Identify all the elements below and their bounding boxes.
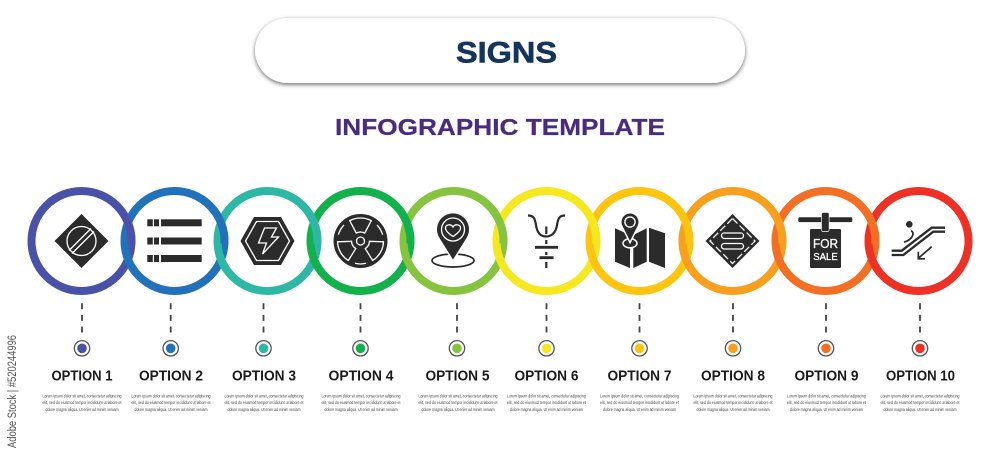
marker dot	[632, 341, 647, 356]
description: dolore magna aliqua. Ut enim ad minim veniam	[790, 407, 863, 412]
marker dot	[539, 341, 554, 356]
description: dolore magna aliqua. Ut enim ad minim veniam	[510, 407, 583, 412]
description: Lorem ipsum dolor sit amet, consectetur adipiscing	[42, 394, 122, 398]
label: OPTION 5	[426, 368, 490, 384]
description: elit, sed do eiusmod tempor incididunt ut labore et	[507, 400, 587, 405]
description	[787, 394, 867, 412]
icon: down escalator	[892, 221, 945, 259]
marker dot	[449, 341, 465, 356]
marker dot	[818, 341, 834, 356]
marker dot	[725, 341, 741, 356]
description: Lorem ipsum dolor sit amet, consectetur adipiscing	[694, 394, 773, 398]
option 1	[42, 214, 122, 412]
stock id side text: Adobe Stock | #520244996	[7, 335, 19, 448]
connector	[360, 303, 362, 333]
description	[224, 394, 304, 412]
description	[322, 394, 401, 412]
description	[880, 394, 960, 412]
description: elit, sed do eiusmod tempor incididunt ut labore et	[880, 400, 960, 405]
label: OPTION 1	[52, 368, 112, 384]
option 8	[694, 214, 773, 412]
description: elit, sed do eiusmod tempor incididunt ut labore et	[42, 400, 122, 405]
marker dot	[163, 341, 178, 356]
label: OPTION 7	[608, 368, 672, 384]
description: dolore magna aliqua. Ut enim ad minim veniam	[696, 407, 770, 412]
icon: equal sign diamond	[706, 214, 760, 268]
icon: no-entry diamond	[54, 214, 108, 268]
label: OPTION 9	[794, 368, 858, 384]
icon: heart location pin	[432, 213, 474, 267]
connector	[81, 303, 83, 333]
description: dolore magna aliqua. Ut enim ad minim veniam	[422, 407, 495, 412]
option 2	[132, 219, 211, 412]
option 4	[322, 214, 401, 412]
option 6	[507, 216, 587, 412]
option 9	[787, 213, 867, 412]
title pill	[255, 18, 745, 83]
option 3	[224, 217, 304, 412]
description: elit, sed do eiusmod tempor incididunt ut labore et	[787, 400, 867, 405]
connector	[546, 303, 548, 333]
marker dot	[256, 341, 271, 356]
description: elit, sed do eiusmod tempor incididunt ut labore et	[132, 400, 211, 405]
subtitle: INFOGRAPHIC TEMPLATE	[335, 114, 665, 140]
description	[694, 394, 773, 412]
icon: electric hexagon	[240, 217, 294, 265]
marker dot	[353, 341, 368, 356]
label: OPTION 10	[886, 368, 955, 384]
description: Lorem ipsum dolor sit amet, consectetur adipiscing	[880, 394, 960, 398]
description: elit, sed do eiusmod tempor incididunt ut labore et	[418, 400, 498, 405]
description: Lorem ipsum dolor sit amet, consectetur adipiscing	[507, 394, 586, 398]
icon: narrowing road symbol	[528, 216, 565, 268]
description: dolore magna aliqua. Ut enim ad minim veniam	[603, 407, 676, 412]
marker dot	[912, 341, 928, 356]
description: Lorem ipsum dolor sit amet, consectetur adipiscing	[600, 394, 679, 398]
description	[42, 394, 122, 412]
connector	[262, 303, 264, 333]
label: OPTION 2	[139, 368, 203, 384]
description: elit, sed do eiusmod tempor incididunt ut labore et	[694, 400, 773, 405]
interlocking rings	[32, 191, 968, 291]
connector	[919, 303, 921, 333]
description: Lorem ipsum dolor sit amet, consectetur adipiscing	[322, 394, 401, 398]
description: Lorem ipsum dolor sit amet, consectetur adipiscing	[787, 394, 866, 398]
connector	[732, 303, 734, 333]
description	[600, 394, 680, 412]
label: OPTION 8	[701, 368, 765, 384]
label: OPTION 4	[328, 368, 394, 384]
description: elit, sed do eiusmod tempor incididunt ut labore et	[600, 400, 680, 405]
description: dolore magna aliqua. Ut enim ad minim veniam	[884, 407, 957, 412]
icon: for sale sign: FOR	[813, 236, 838, 251]
description: elit, sed do eiusmod tempor incididunt ut labore et	[224, 400, 304, 405]
description: Lorem ipsum dolor sit amet, consectetur adipiscing	[224, 394, 304, 398]
marker dot	[74, 341, 90, 356]
icon: map with pin	[615, 213, 665, 268]
connector	[170, 303, 172, 333]
description: Lorem ipsum dolor sit amet, consectetur adipiscing	[418, 394, 498, 398]
icon: radiation	[334, 214, 388, 268]
title: SIGNS	[456, 36, 557, 70]
option 7	[600, 213, 680, 412]
icon: list	[147, 219, 202, 262]
icon: for sale sign: SALE	[813, 252, 838, 263]
description: dolore magna aliqua. Ut enim ad minim veniam	[324, 407, 398, 412]
icon: for sale sign	[798, 213, 852, 268]
description: dolore magna aliqua. Ut enim ad minim veniam	[228, 407, 301, 412]
description: dolore magna aliqua. Ut enim ad minim veniam	[134, 407, 208, 412]
connector	[638, 303, 640, 333]
label: OPTION 3	[232, 368, 296, 384]
description: elit, sed do eiusmod tempor incididunt ut labore et	[322, 400, 401, 405]
connector	[825, 303, 827, 333]
description: Lorem ipsum dolor sit amet, consectetur adipiscing	[132, 394, 211, 398]
description	[507, 394, 587, 412]
connector	[456, 303, 458, 333]
description	[418, 394, 498, 412]
option 10	[880, 221, 960, 412]
description	[132, 394, 211, 412]
description: dolore magna aliqua. Ut enim ad minim veniam	[46, 407, 119, 412]
label: OPTION 6	[514, 368, 578, 384]
option 5	[418, 213, 498, 412]
